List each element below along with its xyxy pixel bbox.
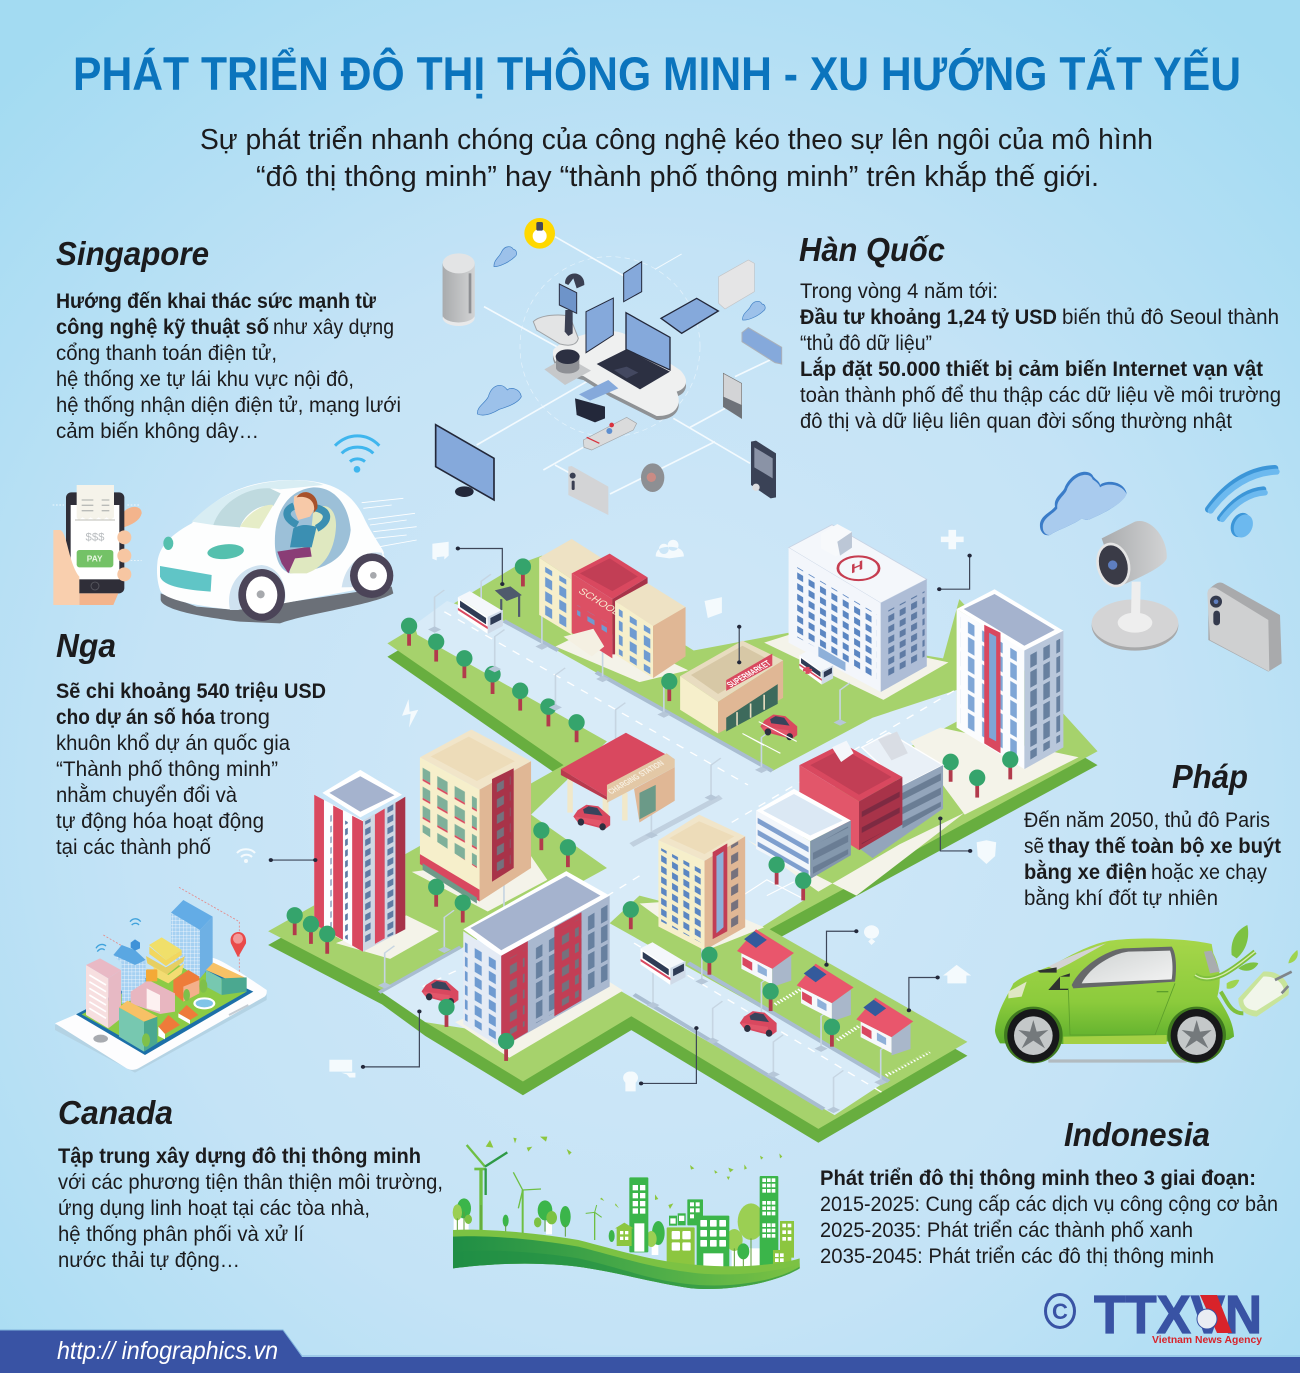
intro text: Sự phát triển nhanh chóng của công nghệ kéo theo sự lên ngôi của mô hình: [200, 124, 1153, 156]
tree: [498, 1033, 514, 1061]
footer url: http:// infographics.vn: [57, 1337, 278, 1365]
text block: Pháp: bằng khí đốt tự nhiên: [1024, 887, 1218, 910]
trees mid left: [428, 879, 471, 923]
text block: Pháp: sẽ: [1024, 835, 1044, 858]
icon: cloud, camera, wifi and sensor group: [1040, 468, 1282, 672]
building: charging station: CHARGING STATION: [606, 759, 666, 796]
icon: display device: [742, 328, 782, 364]
text block: Singapore: Hướng đến khai thác sức mạnh từ: [56, 290, 377, 313]
trees far left: [287, 907, 335, 954]
icon: tv monitor: [436, 425, 494, 500]
icon: phone payment: [53, 485, 142, 605]
tree: [661, 673, 677, 701]
trees office: [768, 856, 811, 900]
houses: [737, 929, 913, 1055]
panel: Nga: [56, 627, 326, 859]
illustration: isometric smart city: [268, 524, 1098, 1143]
building: cream apartments: [420, 730, 531, 904]
building: right tower: [957, 589, 1063, 769]
text block: Singapore: cổng thanh toán điện tử,: [56, 342, 277, 365]
logo: TTXVN: TTXVN: [1094, 1285, 1262, 1345]
logo: TTXVN: Vietnam News Agency: [1152, 1334, 1262, 1346]
icon: bulb: [524, 218, 555, 249]
heading: Hàn Quốc: Hàn Quốc: [799, 231, 945, 268]
trees charging: [533, 822, 576, 867]
text block: Nga: Sẽ chi khoảng 540 triệu USD: [56, 680, 326, 703]
trees right: [943, 751, 1018, 798]
building: grey office rear: [859, 732, 943, 858]
text block: Hàn Quốc: [800, 280, 1281, 433]
heading: Pháp: Pháp: [1172, 758, 1248, 795]
icon: remote control: [583, 417, 637, 450]
icon: green electric car: [995, 925, 1298, 1063]
text block: Hàn Quốc: Đầu tư khoảng 1,24 tỷ USD: [800, 306, 1057, 329]
text block: Singapore: hệ thống nhận diện điện tử, mạng lưới: [56, 394, 401, 417]
text block: Hàn Quốc: đô thị và dữ liệu liên quan đời sống thường nhật: [800, 410, 1232, 433]
text block: Singapore: công nghệ kỹ thuật số: [56, 316, 269, 339]
road markings: [423, 612, 954, 1093]
icon: landscape tablet: [661, 298, 718, 333]
panel: Pháp: [1024, 758, 1281, 910]
text block: Canada: Tập trung xây dựng đô thị thông minh: [58, 1145, 421, 1168]
text block: Nga: “Thành phố thông minh”: [56, 758, 278, 781]
building: supermarket: [680, 641, 783, 734]
panel: Canada: [58, 1094, 443, 1272]
ground wave: [453, 1230, 800, 1289]
text block: Pháp: thay thế toàn bộ xe buýt: [1048, 835, 1281, 858]
text block: Singapore: như xây dựng: [273, 316, 394, 339]
intro text: [200, 124, 1153, 193]
building: school: SCHOOL: [575, 587, 622, 618]
text block: Singapore: cảm biến không dây…: [56, 420, 259, 443]
birds: [486, 1137, 782, 1209]
text block: Pháp: hoặc xe chạy: [1151, 861, 1267, 884]
icon: main cloud platform: [533, 315, 686, 420]
text block: Indonesia: 2025-2035: Phát triển các thành phố xanh: [820, 1219, 1193, 1242]
icon: self-driving car: [157, 480, 417, 623]
text block: Hàn Quốc: “thủ đô dữ liệu”: [800, 332, 932, 355]
icon: wall device: [568, 466, 608, 515]
icon: bus: [432, 542, 449, 560]
buildings: [615, 1176, 794, 1267]
tree: [438, 999, 455, 1027]
icon: keypad lock: [751, 441, 776, 498]
text block: Pháp: [1024, 809, 1281, 910]
logo: TTXVN: C: [1052, 1299, 1068, 1324]
heading: Nga: Nga: [56, 627, 116, 664]
illustration: green city: [453, 1137, 800, 1289]
icon: smart watch: [559, 274, 584, 336]
building: school: [539, 539, 686, 678]
panel: Hàn Quốc: [799, 231, 1281, 433]
icon: clouds: [477, 247, 765, 415]
icon: laptop: [597, 313, 670, 389]
icon: door sensor: [723, 373, 742, 418]
panel: Singapore: [56, 235, 401, 443]
trees: [453, 1198, 764, 1259]
icon: shield: [977, 840, 996, 864]
heading: Singapore: Singapore: [56, 235, 209, 272]
panel: IoT devices cluster: [436, 218, 782, 515]
icon: cylinder speaker: [443, 253, 475, 326]
building: central cream tower: [658, 815, 745, 950]
connecting lines: [477, 237, 770, 494]
text block: Indonesia: [820, 1167, 1278, 1268]
icon: tablet with smart city: [55, 887, 267, 1073]
text block: Nga: cho dự án số hóa: [56, 706, 215, 729]
text block: Singapore: [56, 290, 401, 443]
text block: Nga: tại các thành phố: [56, 836, 211, 859]
ambulance: [799, 650, 833, 685]
ground plate top: [268, 556, 1098, 1129]
bus: [458, 591, 503, 634]
white tree backdrops: [454, 1218, 762, 1268]
icon: thermostat: [719, 260, 754, 309]
building: red office: [799, 741, 902, 850]
icon: home: [943, 965, 971, 983]
icon: light bulb: [623, 1071, 638, 1091]
white service icons: [329, 530, 996, 1091]
roads: [382, 601, 957, 1115]
icon: phone payment: $$$: [86, 532, 105, 544]
parking lines: [742, 722, 805, 900]
street lamps: [378, 574, 890, 1113]
building: supermarket: SUPERMARKET: [725, 659, 774, 690]
icon: people: [656, 540, 684, 558]
text block: Canada: ứng dụng linh hoạt tại các tòa nhà,: [58, 1197, 370, 1220]
sidewalks and lots: [336, 627, 1079, 1058]
text block: Nga: [56, 680, 326, 859]
turbines: [467, 1145, 602, 1242]
text block: Pháp: bằng xe điện: [1024, 860, 1147, 884]
heading: Indonesia: Indonesia: [1064, 1116, 1210, 1153]
car lower left: [422, 979, 458, 1005]
text block: Nga: khuôn khổ dự án quốc gia: [56, 732, 290, 755]
building: large grey block: [463, 871, 610, 1048]
footer band: [0, 1330, 1300, 1373]
car lower road: [740, 1011, 777, 1037]
text block: Hàn Quốc: biến thủ đô Seoul thành: [1062, 306, 1279, 329]
callout lines: [271, 548, 970, 1083]
icon: lightning: [402, 699, 418, 728]
text block: Nga: nhằm chuyển đổi và: [56, 784, 237, 807]
building: red-striped tower: [314, 770, 405, 952]
car at charging station: [573, 805, 610, 830]
text block: Hàn Quốc: toàn thành phố để thu thập các dữ liệu về môi trường: [800, 384, 1281, 407]
icon: tablet: [586, 262, 642, 353]
icon: small band: [575, 380, 618, 422]
icon: sun: [864, 925, 879, 945]
icon: wifi city: [237, 849, 255, 862]
trees along upper road: [401, 558, 585, 742]
text block: Singapore: hệ thống xe tự lái khu vực nội đô,: [56, 368, 354, 391]
building windows: [620, 1178, 791, 1262]
building: front low office: [756, 789, 851, 879]
icon: plus: [941, 530, 964, 549]
text block: Nga: tự động hóa hoạt động: [56, 810, 264, 833]
text block: Nga: trong: [220, 706, 270, 729]
icon: phone payment: PAY: [87, 554, 103, 564]
panel: Indonesia: [820, 1116, 1278, 1268]
text block: Canada: nước thải tự động…: [58, 1249, 240, 1272]
text block: Canada: hệ thống phân phối và xử lí: [58, 1223, 304, 1246]
text block: Canada: [58, 1145, 443, 1272]
icon: security camera: [329, 1060, 355, 1078]
text block: Indonesia: 2035-2045: Phát triển các đô thị thông minh: [820, 1245, 1214, 1268]
text block: Indonesia: Phát triển đô thị thông minh theo 3 giai đoạn:: [820, 1167, 1256, 1190]
icon: wifi car: [335, 436, 379, 471]
text block: Indonesia: 2015-2025: Cung cấp các dịch vụ công cộng cơ bản: [820, 1193, 1278, 1216]
text block: Hàn Quốc: Trong vòng 4 năm tới:: [800, 280, 998, 303]
bus stop: [495, 586, 522, 617]
trees and fences at houses: [763, 983, 929, 1076]
text block: Pháp: Đến năm 2050, thủ đô Paris: [1024, 809, 1270, 832]
building: hospital: [789, 524, 927, 692]
bus lower: [641, 942, 686, 985]
tree: [701, 947, 718, 975]
car near supermarket: [760, 715, 797, 740]
building: hospital: H: [851, 557, 863, 577]
ground plate side: [268, 569, 1098, 1143]
icon: smoke sensor: [641, 463, 664, 492]
text block: Hàn Quốc: Lắp đặt 50.000 thiết bị cảm biến Internet vạn vật: [800, 357, 1263, 381]
text block: Canada: với các phương tiện thân thiện môi trường,: [58, 1171, 443, 1194]
heading: Canada: Canada: [58, 1094, 173, 1131]
building: charging station: [561, 733, 675, 826]
intro text: “đô thị thông minh” hay “thành phố thông minh” trên khắp thế giới.: [256, 160, 1099, 193]
icon: shopping basket: [705, 597, 722, 618]
